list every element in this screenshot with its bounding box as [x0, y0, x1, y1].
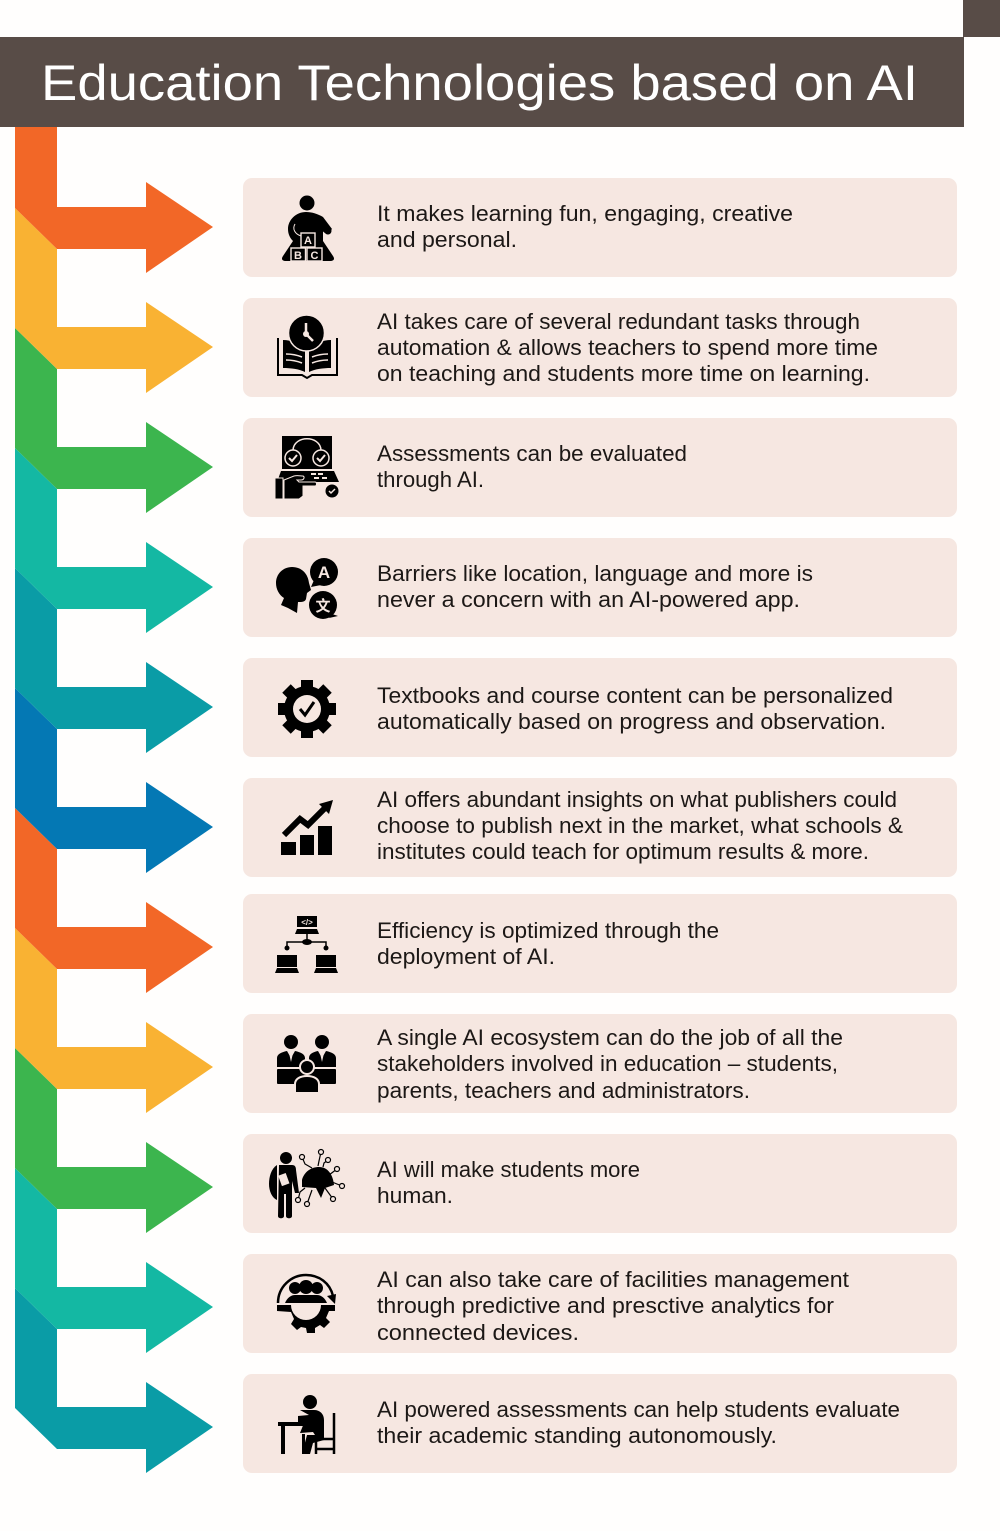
text: institutes could teach for optimum results & more.	[377, 839, 869, 864]
arrow 10 teal	[15, 1168, 213, 1353]
text: their academic standing autonomously.	[377, 1423, 777, 1448]
icon: network of laptops: </>	[301, 918, 313, 927]
icon: child with blocks: B	[294, 250, 302, 262]
arrow 3 green	[15, 328, 213, 513]
text: Barriers like location, language and more is	[377, 561, 813, 586]
icon: child with blocks: A	[304, 235, 312, 247]
text: through predictive and presctive analytics for	[377, 1293, 834, 1318]
card 7	[243, 894, 957, 993]
arrows: connected flow spine	[15, 127, 213, 1473]
card 10	[243, 1254, 957, 1353]
text: AI offers abundant insights on what publishers could	[377, 787, 897, 812]
text: AI can also take care of facilities management	[377, 1267, 849, 1292]
text	[377, 441, 687, 492]
arrow 6 blue	[15, 688, 213, 873]
text	[377, 1025, 843, 1103]
arrow 2 yellow	[15, 208, 213, 393]
icon: language speech	[276, 558, 338, 619]
arrow 1 orange	[15, 127, 213, 273]
text: deployment of AI.	[377, 944, 555, 969]
card 8	[243, 1014, 957, 1113]
text	[377, 201, 793, 252]
card 2	[243, 298, 957, 397]
text: and personal.	[377, 227, 517, 252]
text: choose to publish next in the market, what schools &	[377, 813, 903, 838]
text	[377, 918, 719, 969]
icon: book with clock	[278, 315, 337, 378]
text: automation & allows teachers to spend more time	[377, 335, 878, 360]
text: AI powered assessments can help students evaluate	[377, 1397, 900, 1422]
card 3	[243, 418, 957, 517]
text: human.	[377, 1183, 453, 1208]
text: A single AI ecosystem can do the job of all the	[377, 1025, 843, 1050]
text: Assessments can be evaluated	[377, 441, 687, 466]
arrow 7 orange	[15, 808, 213, 993]
text: stakeholders involved in education – students,	[377, 1051, 838, 1076]
icon: language speech: 文	[315, 597, 331, 615]
arrow 8 yellow	[15, 928, 213, 1113]
text: Textbooks and course content can be personalized	[377, 683, 893, 708]
card 11	[243, 1374, 957, 1473]
text: AI takes care of several redundant tasks through	[377, 309, 860, 334]
icon: child with blocks	[282, 196, 334, 262]
arrow 4 teal	[15, 448, 213, 633]
card 5	[243, 658, 957, 757]
icon: student and AI brain	[269, 1150, 344, 1218]
text: never a concern with an AI-powered app.	[377, 587, 800, 612]
text: on teaching and students more time on learning.	[377, 361, 870, 386]
icon: gear with check	[278, 680, 336, 738]
arrow 11 dark teal	[15, 1288, 213, 1473]
text	[377, 1397, 900, 1448]
text	[377, 683, 893, 734]
text: through AI.	[377, 467, 484, 492]
text	[377, 561, 813, 612]
text: It makes learning fun, engaging, creative	[377, 201, 793, 226]
text: automatically based on progress and observation.	[377, 709, 886, 734]
icon: people and gear	[277, 1275, 336, 1333]
text	[377, 309, 878, 386]
text: Efficiency is optimized through the	[377, 918, 719, 943]
arrow 9 green	[15, 1048, 213, 1233]
text	[377, 787, 903, 864]
title banner	[0, 37, 964, 127]
text: connected devices.	[377, 1320, 579, 1345]
arrow 5 dark teal	[15, 568, 213, 753]
card 6	[243, 778, 957, 877]
header corner square	[963, 0, 1000, 37]
icon: stakeholders group	[277, 1035, 336, 1093]
card 1	[243, 178, 957, 277]
text	[377, 1157, 640, 1208]
icon: assessment laptop and hand	[275, 436, 339, 499]
text: parents, teachers and administrators.	[377, 1078, 750, 1103]
card 9	[243, 1134, 957, 1233]
icon: language speech: A	[318, 563, 330, 582]
title: Education Technologies based on AI	[41, 55, 918, 111]
text: AI will make students more	[377, 1157, 640, 1182]
icon: network of laptops	[275, 916, 338, 973]
icon: growth chart	[281, 800, 333, 855]
icon: child with blocks: C	[311, 250, 319, 262]
text	[377, 1267, 849, 1345]
card 4	[243, 538, 957, 637]
icon: student at desk	[278, 1395, 334, 1454]
